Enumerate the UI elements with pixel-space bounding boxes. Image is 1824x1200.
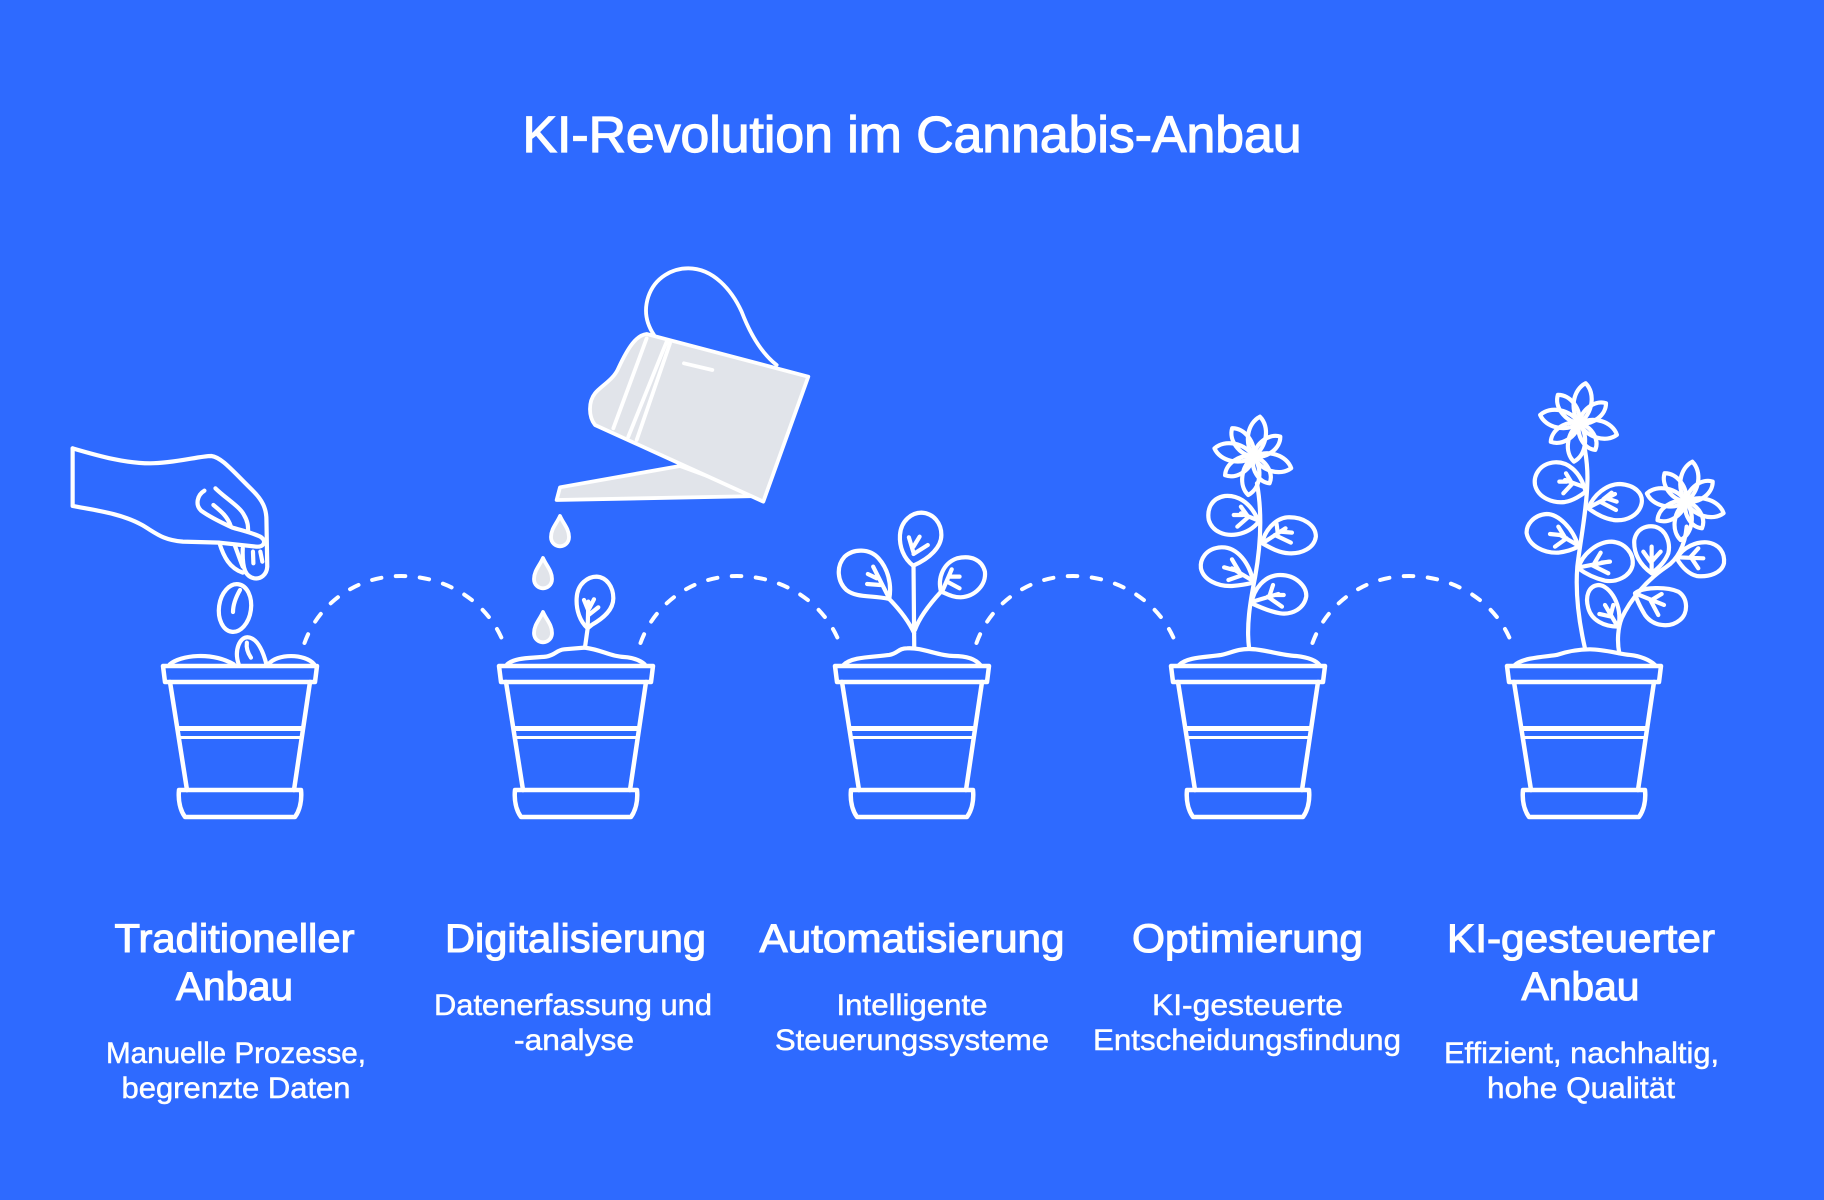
- step 3 text: [760, 917, 1064, 1057]
- dashed arrow 1: [304, 576, 502, 643]
- step 1 description: begrenzte Daten: [122, 1072, 350, 1105]
- pot 2 with sprout: [499, 577, 653, 817]
- pot 5 with mature plant: [1507, 382, 1726, 817]
- step 4 heading: Optimierung: [1132, 917, 1363, 961]
- step 5 heading: [1447, 917, 1715, 1009]
- step 1 heading: Traditioneller: [114, 917, 354, 961]
- dashed arrow 3: [976, 576, 1174, 643]
- step 1 description: Manuelle Prozesse,: [106, 1037, 366, 1070]
- flower: [1213, 415, 1294, 496]
- step 3 description: Intelligente: [836, 989, 988, 1022]
- step 4 description: KI-gesteuerte: [1152, 989, 1343, 1022]
- step 3 description: Steuerungssysteme: [775, 1024, 1049, 1057]
- flowering plant and soil: [1179, 415, 1319, 665]
- step 1 text: [106, 917, 366, 1105]
- step 4 description: [1093, 989, 1401, 1057]
- step 5 heading: KI-gesteuerter: [1447, 917, 1715, 961]
- can handle: [613, 268, 777, 440]
- icon: watering can: [557, 268, 808, 502]
- step 3 description: [775, 989, 1049, 1057]
- step 1 heading: Anbau: [176, 965, 293, 1009]
- step 5 description: [1444, 1037, 1719, 1105]
- step 1 description: [106, 1037, 366, 1105]
- step 5 description: Effizient, nachhaltig,: [1444, 1037, 1719, 1070]
- step 1 heading: [114, 917, 354, 1009]
- step 2 description: [434, 989, 712, 1057]
- can spout: [557, 466, 762, 500]
- sprout and soil: [507, 577, 645, 664]
- soil and planted seeds: [170, 637, 314, 664]
- step 5 text: [1444, 917, 1719, 1105]
- icon: falling seed: [216, 582, 254, 634]
- step 2 description: -analyse: [514, 1024, 634, 1057]
- step 4 text: [1093, 917, 1401, 1057]
- step 5 description: hohe Qualität: [1487, 1072, 1676, 1105]
- icon: hand dropping seeds: [73, 448, 267, 634]
- step 3 heading: Automatisierung: [760, 917, 1064, 961]
- dashed arrow 2: [640, 576, 838, 643]
- dashed arrow 4: [1312, 576, 1510, 643]
- water drops: [534, 516, 569, 642]
- step 2 description: Datenerfassung und: [434, 989, 712, 1022]
- pot 4 with flowering plant: [1171, 415, 1325, 817]
- pot 3 with seedling: [835, 513, 989, 817]
- upper flower: [1538, 382, 1619, 463]
- mature plant and soil: [1515, 382, 1726, 665]
- step 4 description: Entscheidungsfindung: [1093, 1024, 1401, 1057]
- seedling and soil: [839, 513, 985, 665]
- title: KI-Revolution im Cannabis-Anbau: [522, 106, 1302, 163]
- step 5 heading: Anbau: [1522, 965, 1640, 1009]
- right flower: [1645, 460, 1726, 541]
- step 2 text: [434, 917, 712, 1057]
- pot 1 with seeds: [163, 637, 317, 817]
- can body: [590, 334, 808, 502]
- step 2 heading: Digitalisierung: [445, 917, 706, 961]
